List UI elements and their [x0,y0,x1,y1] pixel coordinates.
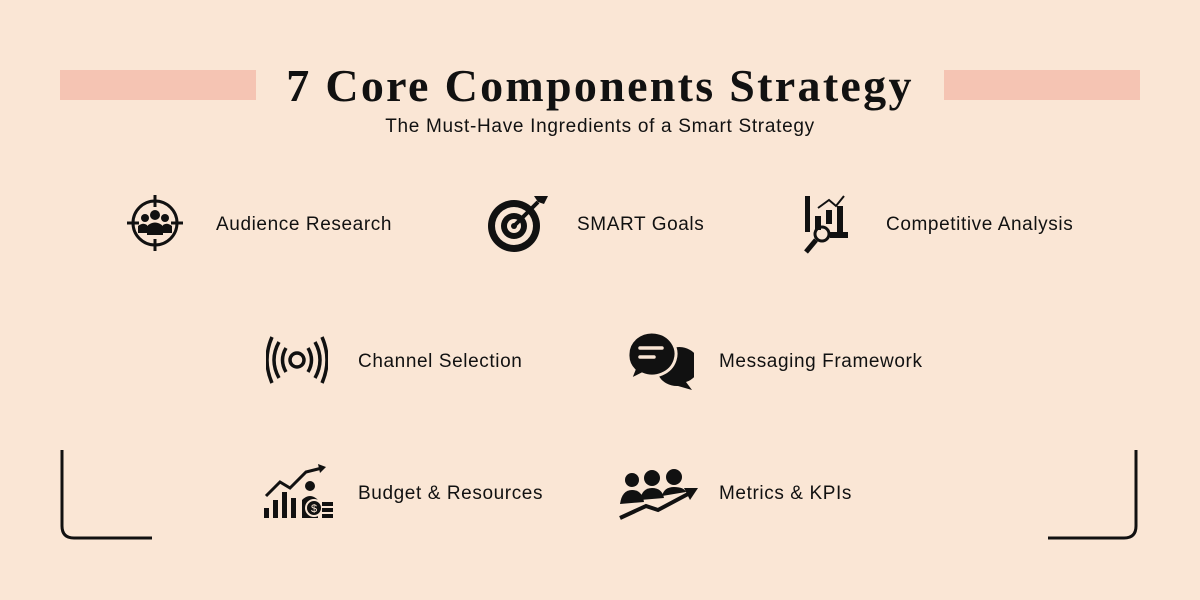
label: channel selection: Channel Selection [358,351,522,372]
decorative bar left [60,70,256,100]
icon: messaging framework [629,334,694,390]
label: SMART goals: SMART Goals [577,214,704,235]
icon: SMART goals target [488,196,548,252]
label: messaging framework: Messaging Framework [719,351,923,372]
icon: budget & resources: $ [311,503,317,515]
icon: audience research [127,195,183,251]
label: budget & resources: Budget & Resources [358,483,543,504]
icon: metrics & KPIs [619,469,698,520]
label: metrics & KPIs: Metrics & KPIs [719,483,852,504]
title: 7 Core Components Strategy [286,60,914,111]
icon: budget & resources [264,464,333,518]
subtitle: The Must-Have Ingredients of a Smart Strategy [385,116,815,137]
decorative bar right [944,70,1140,100]
icon: channel selection broadcast [266,336,328,384]
label: audience research: Audience Research [216,214,392,235]
label: competitive analysis: Competitive Analysis [886,214,1073,235]
icon: competitive analysis [804,195,848,254]
